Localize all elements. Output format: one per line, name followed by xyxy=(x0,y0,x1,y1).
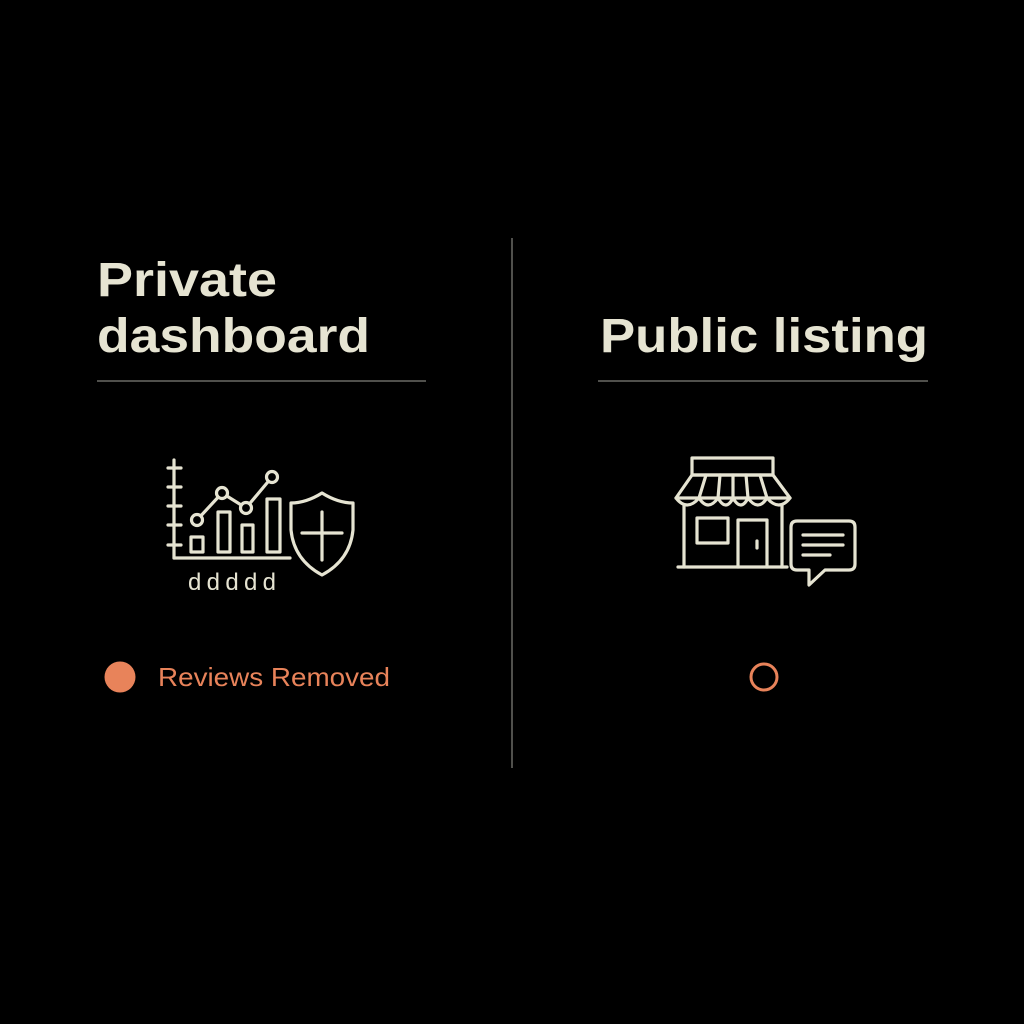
icon: chart with shield xyxy=(168,460,353,575)
legend: empty ring xyxy=(751,664,777,690)
panel: public listing xyxy=(598,310,928,690)
divider: vertical xyxy=(511,238,513,768)
icon: storefront with chat bubble xyxy=(676,458,855,585)
title: Private dashboard: dashboard xyxy=(97,310,370,363)
title: Private dashboard xyxy=(97,254,370,363)
title: Private dashboard: Private xyxy=(97,254,277,307)
icon label: ddddd: ddddd xyxy=(188,569,276,596)
legend: Reviews Removed: Reviews Removed xyxy=(158,662,390,692)
title: Public listing: Public listing xyxy=(600,310,928,363)
panel: private dashboard xyxy=(97,254,426,692)
